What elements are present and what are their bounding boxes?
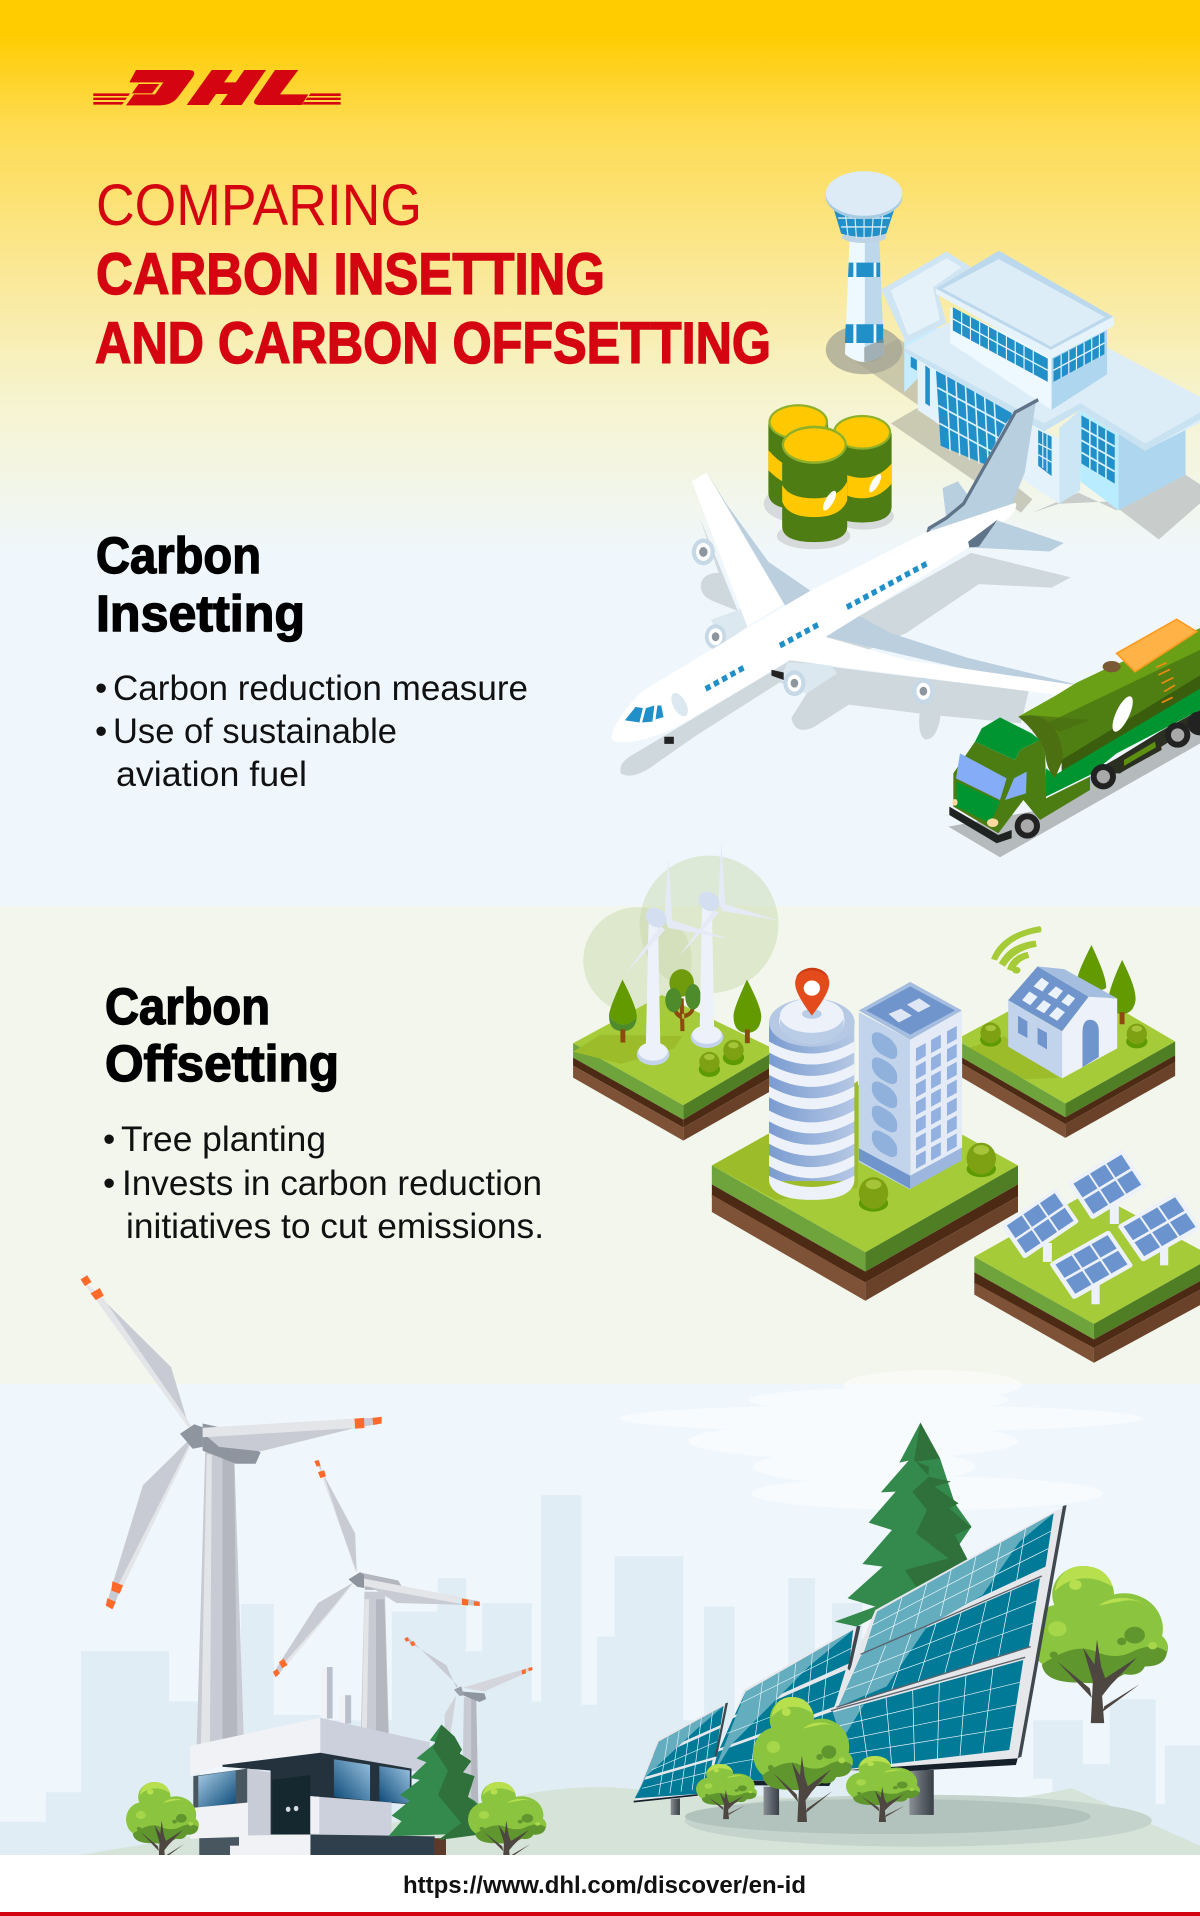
heading: carbon insetting: Carbon [96, 527, 261, 584]
icon: control building [190, 1667, 435, 1857]
title [95, 173, 771, 376]
bullet list: offsetting: • [103, 1164, 115, 1203]
icon: location pin [795, 968, 829, 1019]
icon: pine tree by building [388, 1725, 494, 1857]
title line: comparing: COMPARING [96, 173, 422, 238]
bullet list: insetting: • [95, 712, 107, 751]
text block: carbon offsetting [103, 978, 544, 1246]
icon: large solar panel [831, 1505, 1067, 1772]
bullet list: insetting: aviation fuel [116, 755, 307, 794]
heading: carbon offsetting: Offsetting [105, 1035, 339, 1092]
panel array ground shadow [685, 1795, 1152, 1847]
bullet list: offsetting: Invests in carbon reduction [122, 1164, 542, 1203]
icon: fuel barrels [764, 404, 894, 549]
bullet list: offsetting: Tree planting [121, 1120, 326, 1159]
city skyline [0, 1495, 1200, 1860]
panel: renewable landscape background [0, 1384, 1200, 1856]
icon: left low bush [696, 1764, 757, 1819]
bullet list: insetting: Use of sustainable [113, 712, 397, 751]
icon: right bush [468, 1782, 546, 1864]
heading: carbon offsetting [105, 978, 339, 1092]
heading: carbon insetting [96, 527, 305, 642]
icon: left bush [126, 1782, 199, 1864]
bullet list: offsetting: initiatives to cut emissions. [126, 1207, 544, 1246]
island: central towers [712, 982, 1018, 1301]
icon: medium wind turbine [273, 1460, 480, 1735]
icon: green fuel tanker truck [948, 619, 1200, 857]
icon: front tree [753, 1697, 853, 1822]
island: solar panels [974, 1149, 1200, 1363]
icon: small solar panel [634, 1703, 728, 1802]
illustration: airport, plane and barrels [611, 171, 1200, 776]
footer bar [0, 1855, 1200, 1912]
island: solar house [962, 926, 1175, 1138]
panel: carbon insetting background [0, 560, 1200, 906]
heading: carbon insetting: Insetting [96, 585, 305, 642]
icon: tall pine tree [835, 1423, 972, 1627]
bullet list: insetting: • [95, 669, 107, 708]
icon: medium solar panel [711, 1626, 860, 1786]
footer url: https://www.dhl.com/discover/en-id [403, 1872, 806, 1899]
illustration: isometric green city [573, 842, 1200, 1363]
icon: bush behind panels [1029, 1566, 1168, 1723]
bullet list: offsetting [103, 1120, 544, 1246]
clouds [620, 1370, 1142, 1510]
bullet list: insetting: Carbon reduction measure [113, 669, 528, 708]
title line: carbon insetting: CARBON INSETTING [96, 242, 605, 307]
island: wind turbines [573, 842, 780, 1141]
footer red line [0, 1912, 1200, 1916]
ground hills [73, 1787, 1200, 1856]
icon: airplane [611, 400, 1080, 744]
illustration: wind turbines and building [81, 1275, 533, 1857]
illustration: solar array and trees [835, 1423, 972, 1627]
panel: carbon offsetting background [0, 906, 1200, 1384]
bullet list: offsetting: • [103, 1120, 115, 1159]
plane shadows [620, 517, 1071, 776]
solar support posts [671, 1770, 934, 1815]
icon: right low bush [846, 1756, 920, 1822]
bullet list: insetting [95, 669, 528, 794]
icon: small wind turbine [404, 1637, 533, 1816]
logo: DHL [93, 70, 341, 105]
background: yellow gradient header [0, 0, 1200, 560]
airport ground shadows [826, 325, 1200, 539]
heading: carbon offsetting: Carbon [105, 978, 270, 1035]
icon: terminal building [881, 251, 1200, 510]
icon: large wind turbine [81, 1275, 382, 1746]
text block: carbon insetting [95, 527, 528, 794]
icon: control tower [826, 171, 902, 362]
title line: and carbon offsetting: AND CARBON OFFSETTING [95, 311, 771, 376]
